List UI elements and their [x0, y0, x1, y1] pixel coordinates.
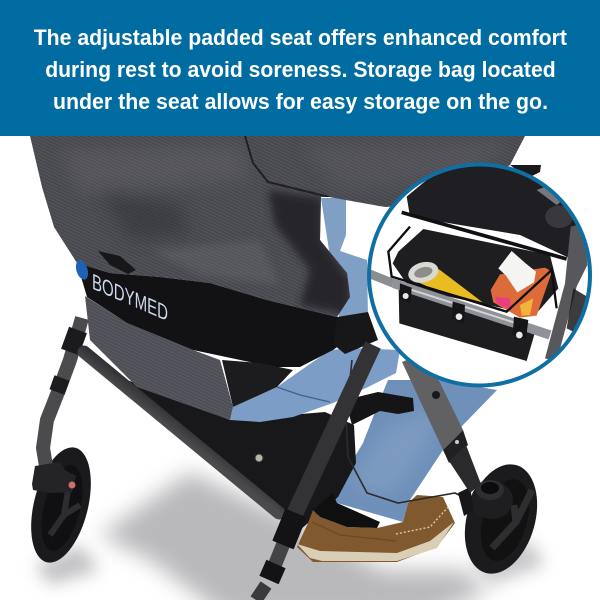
- right frame tube: [402, 352, 481, 493]
- seat frame bar: [402, 212, 567, 259]
- handle knob: [510, 165, 541, 178]
- header band: [0, 0, 600, 136]
- storage bag under seat: [122, 378, 356, 530]
- back strap with logo: [74, 259, 340, 367]
- basket frame: [388, 227, 557, 312]
- walker tube: [545, 223, 587, 362]
- right brake clip: [458, 487, 474, 516]
- inset photo contents: [368, 160, 590, 362]
- seat underside: [406, 166, 576, 258]
- thigh in jeans: [230, 348, 400, 422]
- can: [406, 259, 483, 302]
- bag rivet: [255, 454, 263, 462]
- silver rail behind: [368, 273, 393, 283]
- cable: [346, 360, 463, 503]
- tissue: [498, 251, 536, 292]
- footrest bracket: [345, 392, 414, 425]
- lower leg in jeans: [333, 380, 497, 522]
- header text: during rest to avoid soreness. Storage bag located: [45, 57, 556, 82]
- left fork: [32, 462, 76, 493]
- right wheel: [453, 456, 549, 582]
- lower jacket hem: [85, 296, 233, 420]
- header text: under the seat allows for easy storage on the go.: [53, 89, 548, 114]
- floor shadow: [35, 472, 545, 600]
- bag interior: [393, 229, 558, 315]
- shoe: [297, 495, 455, 562]
- seat velcro patch: [545, 205, 573, 228]
- bag straps with grommets: [399, 283, 528, 339]
- inset magnifier: [368, 160, 590, 386]
- silver rail: [393, 283, 550, 335]
- left frame tube: [43, 318, 82, 466]
- seat cushion patch: [536, 188, 560, 205]
- jacket body: [30, 136, 525, 317]
- right fork housing: [471, 480, 513, 519]
- seat bracket: [334, 312, 378, 354]
- lower frame peek: [566, 288, 586, 332]
- header text: The adjustable padded seat offers enhanced comfort: [34, 25, 568, 50]
- tissue box: [491, 268, 552, 318]
- left wheel: [21, 441, 101, 569]
- front crossbar: [84, 352, 279, 513]
- jacket lining: [222, 360, 293, 407]
- upper jeans behind jacket: [321, 198, 368, 322]
- sock: [313, 493, 380, 528]
- inset ring: [369, 164, 590, 386]
- centre frame tube: [256, 345, 373, 600]
- bag front panel: [399, 288, 537, 361]
- logo badge: [74, 259, 90, 281]
- logo text: BODYMED: [92, 268, 168, 326]
- header text: [34, 25, 568, 114]
